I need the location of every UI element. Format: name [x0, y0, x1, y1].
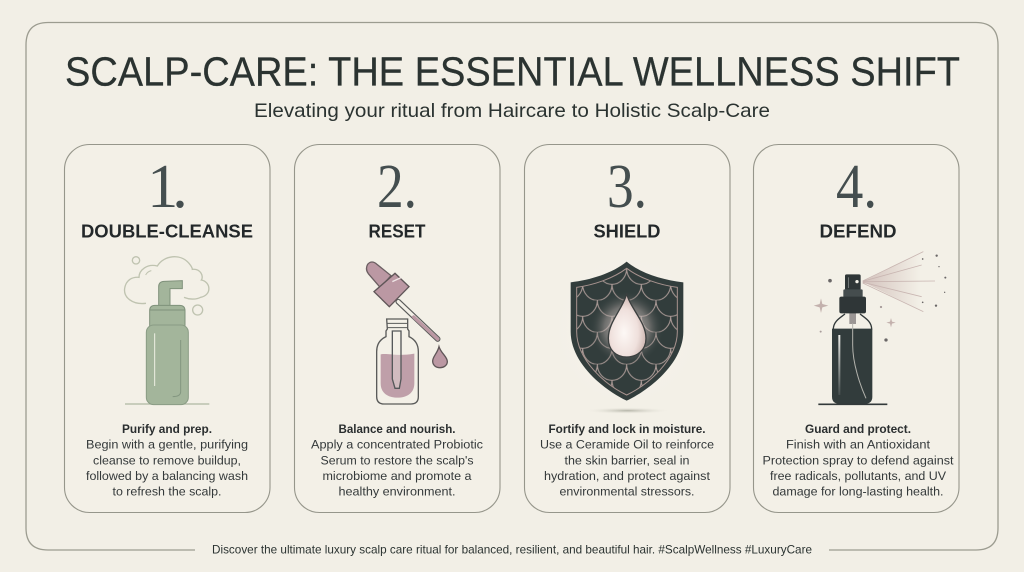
body text: the skin barrier, seal in	[564, 454, 690, 468]
body text: Fortify and lock in moisture.	[548, 422, 706, 436]
body text	[762, 422, 954, 498]
body text: followed by a balancing wash	[86, 469, 248, 483]
body text	[540, 422, 714, 498]
body text	[311, 422, 483, 498]
heading: shield: SHIELD	[594, 222, 660, 242]
icon: foaming cleanser bottle	[125, 257, 209, 405]
body text: Finish with an Antioxidant	[786, 438, 931, 452]
panel: step 1 double-cleanse	[64, 144, 270, 512]
body text: to refresh the scalp.	[112, 484, 222, 498]
body text: cleanse to remove buildup,	[93, 454, 241, 468]
step number 2: 2.	[377, 153, 417, 221]
body text: healthy environment.	[338, 484, 456, 498]
heading: defend: DEFEND	[820, 222, 896, 242]
title: SCALP-CARE: THE ESSENTIAL WELLNESS SHIFT	[65, 48, 960, 94]
body text: damage for long-lasting health.	[772, 484, 944, 498]
body text: Apply a concentrated Probiotic	[311, 438, 483, 452]
subtitle: Elevating your ritual from Haircare to Holistic Scalp-Care	[254, 100, 770, 122]
step number 3: 3.	[607, 153, 647, 221]
step number 4: 4.	[836, 153, 877, 221]
body text: Purify and prep.	[122, 422, 212, 436]
body text: Begin with a gentle, purifying	[86, 438, 248, 452]
icon: serum dropper and bottle	[366, 262, 447, 404]
icon: antioxidant spray bottle	[814, 252, 946, 404]
panel: step 3 shield	[524, 144, 730, 512]
heading: reset: RESET	[368, 222, 426, 242]
step number 1: 1.	[147, 153, 188, 221]
body text: Use a Ceramide Oil to reinforce	[540, 438, 714, 452]
panel: step 2 reset	[294, 144, 500, 512]
body text	[86, 422, 248, 498]
panel: step 4 defend	[754, 144, 959, 512]
body text: Guard and protect.	[805, 422, 911, 436]
heading: double-cleanse: DOUBLE-CLEANSE	[81, 222, 253, 242]
body text: Serum to restore the scalp's	[320, 454, 474, 468]
body text: microbiome and promote a	[322, 469, 472, 483]
body text: environmental stressors.	[560, 484, 694, 498]
body text: Protection spray to defend against	[762, 454, 954, 468]
body text: hydration, and protect against	[544, 469, 711, 483]
body text: free radicals, pollutants, and UV	[770, 469, 947, 483]
body text: Balance and nourish.	[338, 422, 456, 436]
icon: shield with oil drop	[570, 262, 684, 413]
footer caption: Discover the ultimate luxury scalp care ritual for balanced, resilient, and beautiful hair. #ScalpWellness #LuxuryCare	[212, 542, 812, 556]
